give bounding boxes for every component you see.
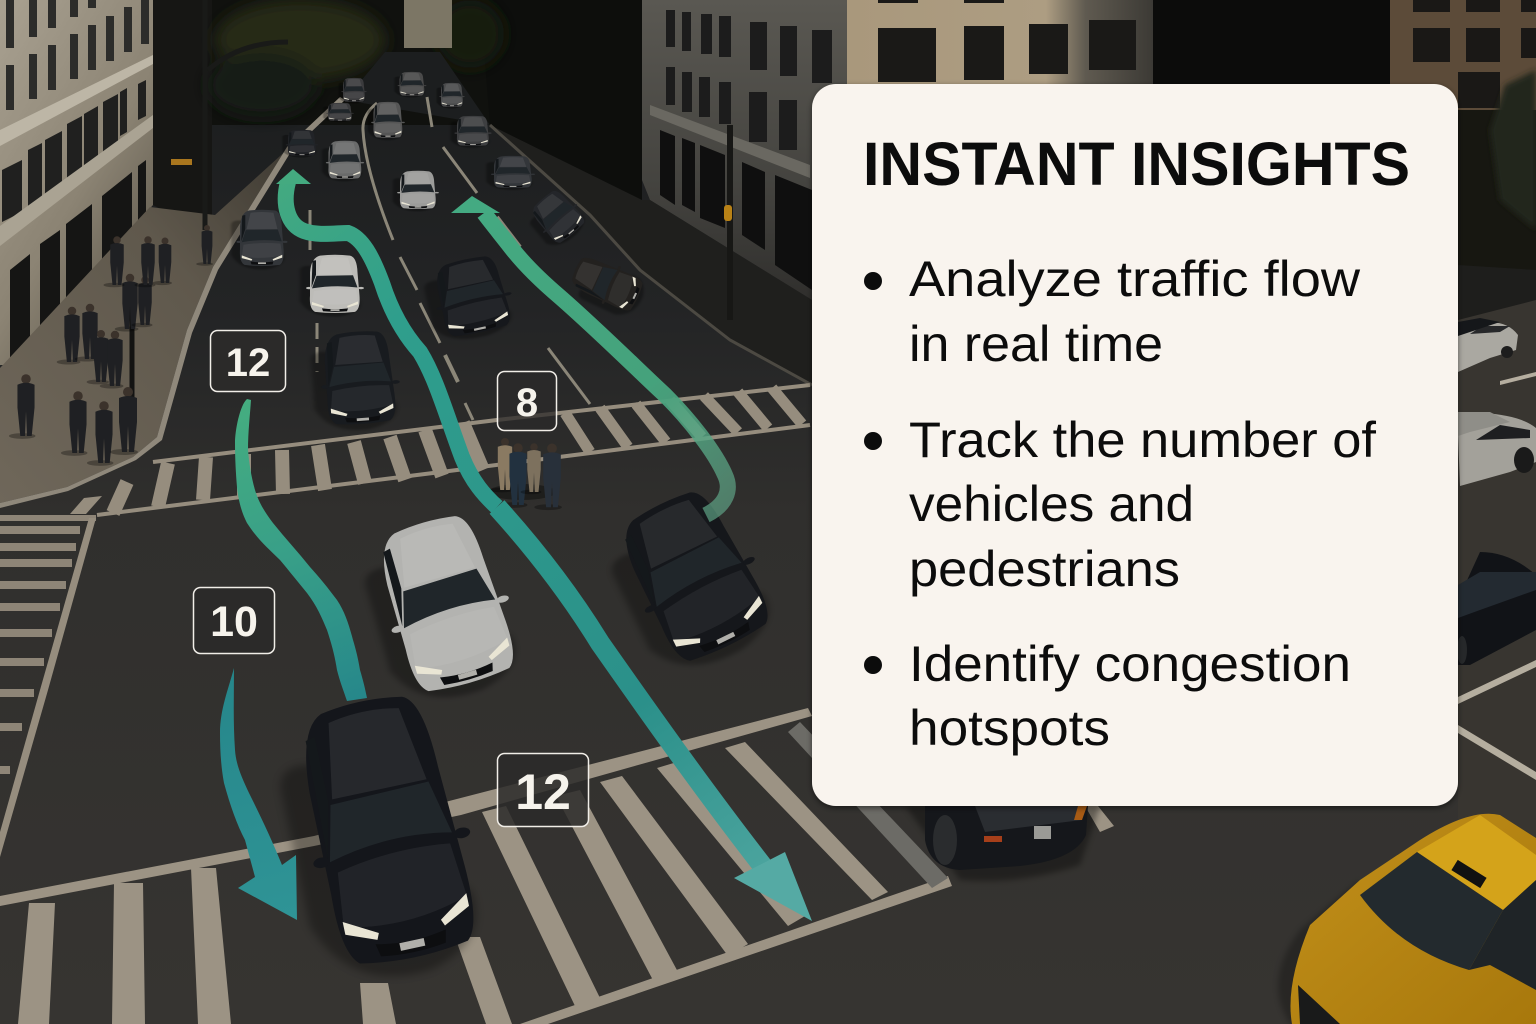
count badge: 8 [498,372,556,430]
arrow: teal lower route [220,668,297,920]
bullet: vehicles and pedestrians [864,412,1376,597]
count badge: 12 upper: 12 [226,341,270,385]
car: dark parked [565,250,651,322]
arrow: green middle route [235,399,367,701]
pedestrian group on crosswalk [488,438,562,510]
cornice and storefronts [650,105,810,178]
arrow: green right route [451,196,728,515]
cream building [847,0,1153,90]
count badge: 10 [194,588,274,654]
bullet: congestion hotspots [864,636,1351,756]
heading: INSTANT INSIGHTS [863,130,1410,198]
car: white midground [300,255,364,317]
bullet: congestion hotspots: hotspots [909,700,1110,756]
right edge road [1458,270,1536,1024]
lamp posts [205,0,288,230]
dark blocks behind trees [153,0,643,125]
distant building [404,0,452,48]
pedestrians on sidewalk [9,225,213,466]
left building [0,0,153,365]
crosswalk: upper [97,385,810,515]
count badge: 12 upper [210,330,286,392]
trees top [207,0,504,117]
bullet: vehicles and pedestrians: pedestrians [909,541,1180,597]
bullet: vehicles and pedestrians: Track the number of [909,412,1376,468]
left sidewalk [0,97,345,503]
bullet: traffic flow: in real time [909,316,1163,372]
bullet: traffic flow [864,251,1361,372]
car: behind card [905,806,1100,881]
count badge: 10: 10 [210,598,258,646]
crosswalk: left [0,515,96,857]
bullet: congestion hotspots: Identify congestion [909,636,1351,692]
crosswalk: lower [0,708,1114,1024]
car: black left lane [309,329,403,433]
upper window rows [666,10,832,150]
arrow: long teal route [276,169,812,921]
brown building [1390,0,1536,200]
bullet: vehicles and pedestrians: vehicles and [909,476,1194,532]
count badge: 12 lower [498,754,588,826]
car: dark midground right lane [523,184,592,253]
distant traffic [231,72,535,270]
right building facade [642,0,847,310]
upper windows [10,0,145,110]
car: silver foreground [353,506,531,713]
car: yellow taxi [1278,814,1536,1024]
car: black midground [420,251,519,346]
storefront windows [10,160,146,362]
middle windows [2,80,146,222]
right edge cars [1457,318,1536,665]
count badge: 12 lower: 12 [515,764,571,820]
lane markings [310,97,590,420]
count badge: 8: 8 [516,381,538,425]
car: black right [594,477,788,686]
distant road [345,52,490,125]
bullet: traffic flow: Analyze traffic flow [909,251,1361,307]
panel: instant insights [812,84,1458,806]
right sidewalk [490,125,812,385]
right side lane lines [1458,372,1536,780]
car: black foreground [266,685,497,993]
